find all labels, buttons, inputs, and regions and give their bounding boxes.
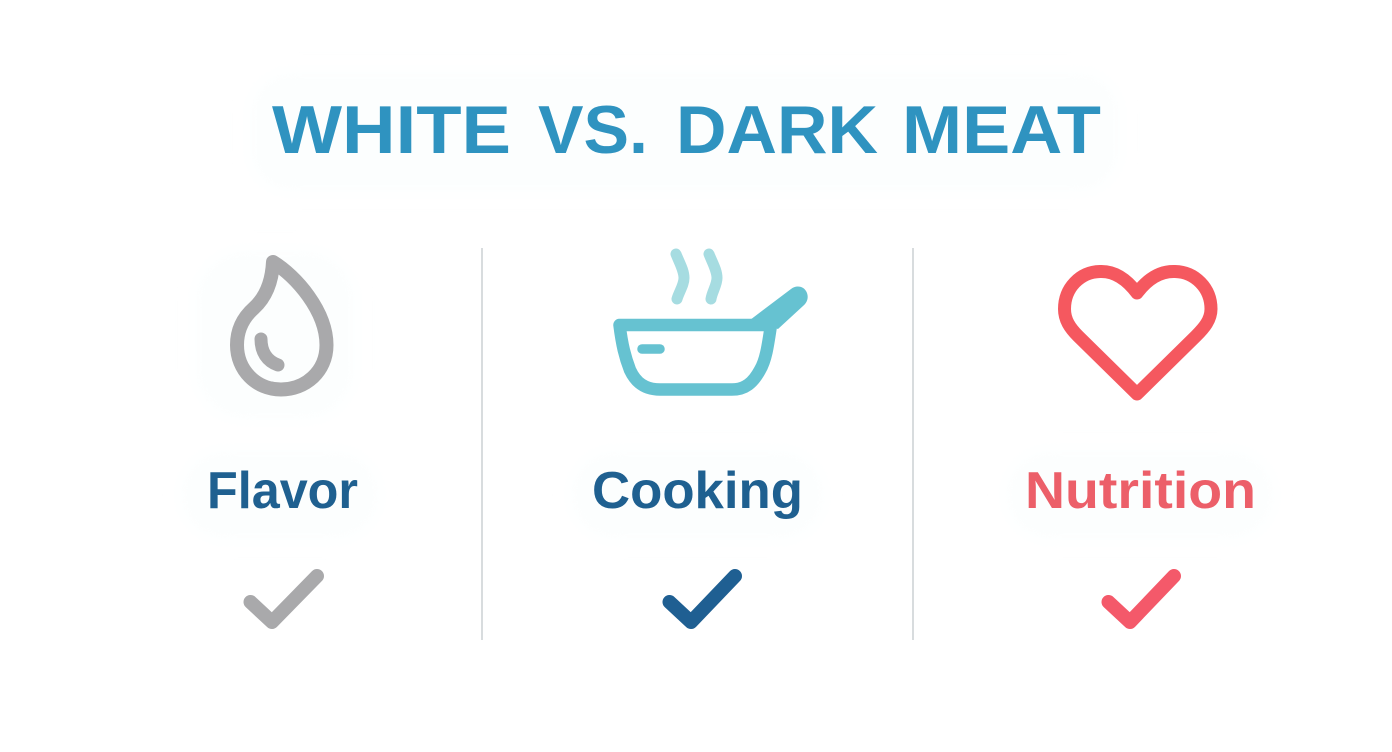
label: flavor: Flavor — [207, 462, 358, 520]
panel: cooking — [592, 254, 808, 622]
icon: blue check mark — [670, 576, 735, 622]
icon: heart — [1064, 271, 1211, 394]
icon: steaming pan — [620, 254, 808, 390]
icon: coral check mark — [1108, 576, 1174, 622]
title: WHITE — [272, 92, 511, 168]
label: nutrition: Nutrition — [1025, 462, 1256, 520]
icon: water drop — [237, 262, 326, 390]
title: VS. — [538, 92, 648, 168]
panel: flavor — [207, 262, 358, 622]
title — [272, 92, 1101, 168]
title: DARK — [676, 92, 878, 168]
title: MEAT — [902, 92, 1101, 168]
icon: grey check mark — [250, 576, 317, 622]
label: cooking: Cooking — [592, 462, 803, 520]
panel: nutrition — [1025, 271, 1256, 622]
